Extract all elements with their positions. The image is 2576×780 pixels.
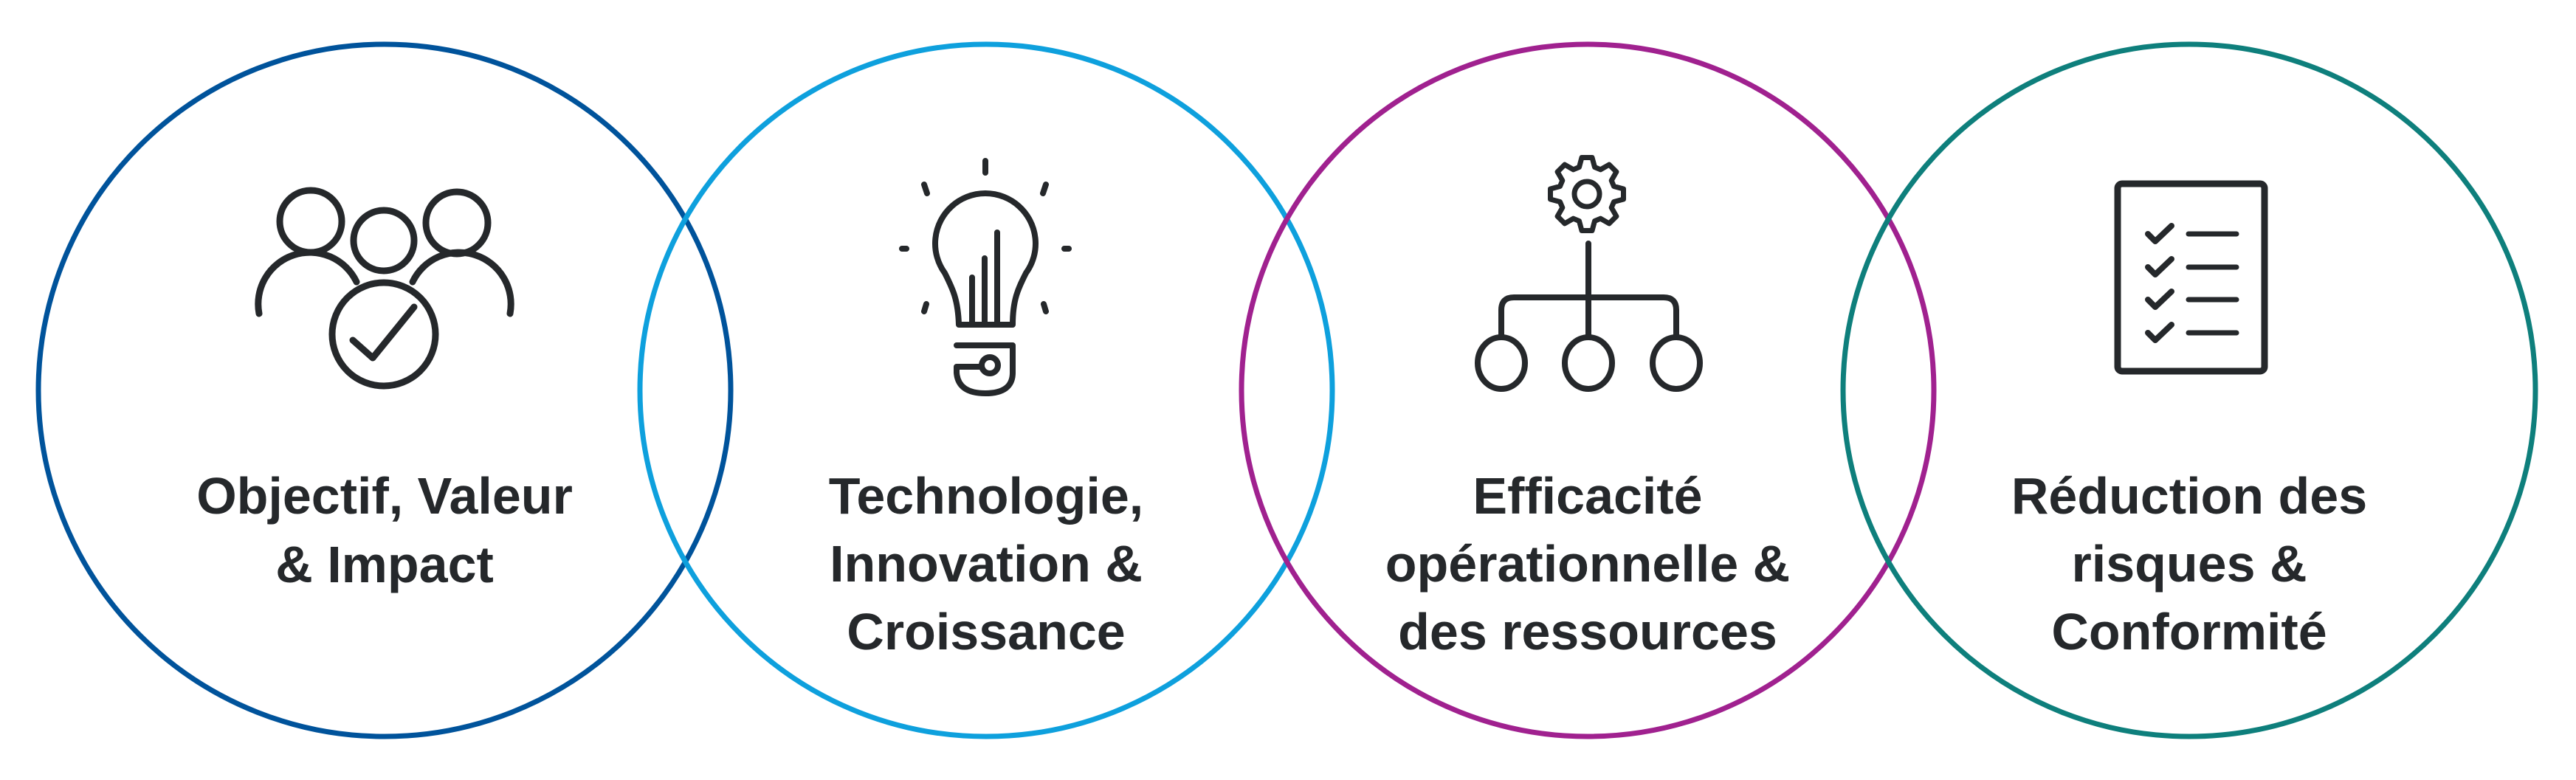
label: Efficacité: Efficacité xyxy=(1473,467,1703,525)
icon: lightbulb xyxy=(902,161,1069,393)
panel: circle 4 Réduction xyxy=(1843,44,2535,736)
label: Efficacité: opérationnelle & xyxy=(1385,535,1790,593)
label: Technologie: Technologie, xyxy=(829,467,1143,525)
label: Objectif: & Impact xyxy=(275,536,494,593)
label: Objectif: Objectif, Valeur xyxy=(196,467,573,525)
panel: circle 3 Efficacité xyxy=(1241,44,1934,736)
icon: people with check xyxy=(258,190,511,386)
label: Technologie: Croissance xyxy=(847,603,1126,660)
icon: checklist xyxy=(2118,184,2265,371)
label: Technologie: Innovation & xyxy=(830,535,1143,593)
panel: circle 1 Objectif xyxy=(38,44,731,736)
icon: gear hierarchy xyxy=(1478,158,1700,389)
label: Réduction: Conformité xyxy=(2051,603,2327,660)
label: Efficacité: des ressources xyxy=(1398,603,1777,660)
label: Réduction: risques & xyxy=(2071,535,2307,593)
panel: circle 2 Technologie xyxy=(640,44,1332,736)
label: Réduction: Réduction des xyxy=(2011,467,2367,525)
